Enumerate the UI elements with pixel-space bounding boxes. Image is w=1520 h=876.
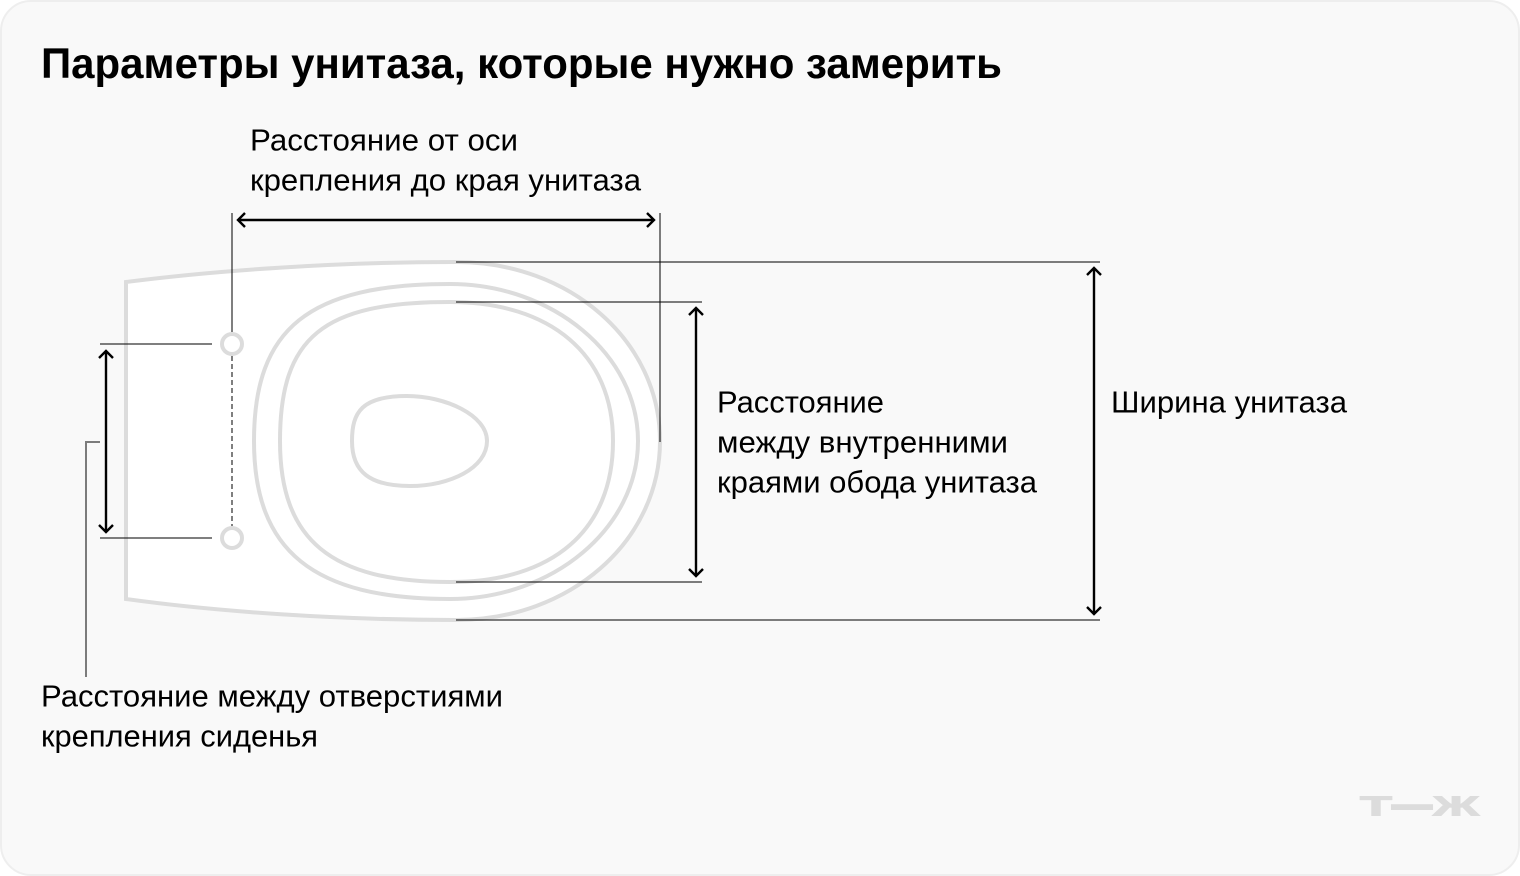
callout leader line — [86, 442, 100, 677]
label: toilet width: Ширина унитаза — [1111, 384, 1348, 420]
seat mounting hole top — [222, 334, 242, 354]
label: distance between holes — [41, 678, 503, 754]
logo: Т — [1360, 790, 1392, 822]
toilet body outline — [126, 262, 660, 620]
seat mounting hole bottom — [222, 528, 242, 548]
bowl hole — [352, 396, 487, 486]
logo: — — [1393, 790, 1431, 820]
label: inner rim distance — [717, 384, 1038, 500]
label: distance between holes: крепления сиденья — [41, 718, 318, 754]
label: inner rim distance: краями обода унитаза — [717, 464, 1038, 500]
label: inner rim distance: между внутренними — [717, 424, 1008, 460]
label: axis to edge: крепления до края унитаза — [250, 162, 642, 198]
outer rim — [254, 284, 638, 599]
label: axis to edge: Расстояние от оси — [250, 122, 518, 158]
arrow: distance between holes — [99, 351, 113, 532]
label: axis to edge — [250, 122, 642, 198]
label: inner rim distance: Расстояние — [717, 384, 884, 420]
logo — [1360, 790, 1480, 822]
extension lines — [100, 213, 1100, 620]
arrow: inner rim distance — [689, 308, 703, 576]
toilet top view drawing — [126, 262, 660, 620]
title: Параметры унитаза, которые нужно замерить — [41, 40, 1002, 88]
arrow: distance from axis to edge — [238, 213, 654, 227]
inner rim — [280, 302, 613, 582]
logo: Ж — [1431, 790, 1480, 822]
arrow: toilet width — [1087, 268, 1101, 614]
label: distance between holes: Расстояние между отверстиями — [41, 678, 503, 714]
